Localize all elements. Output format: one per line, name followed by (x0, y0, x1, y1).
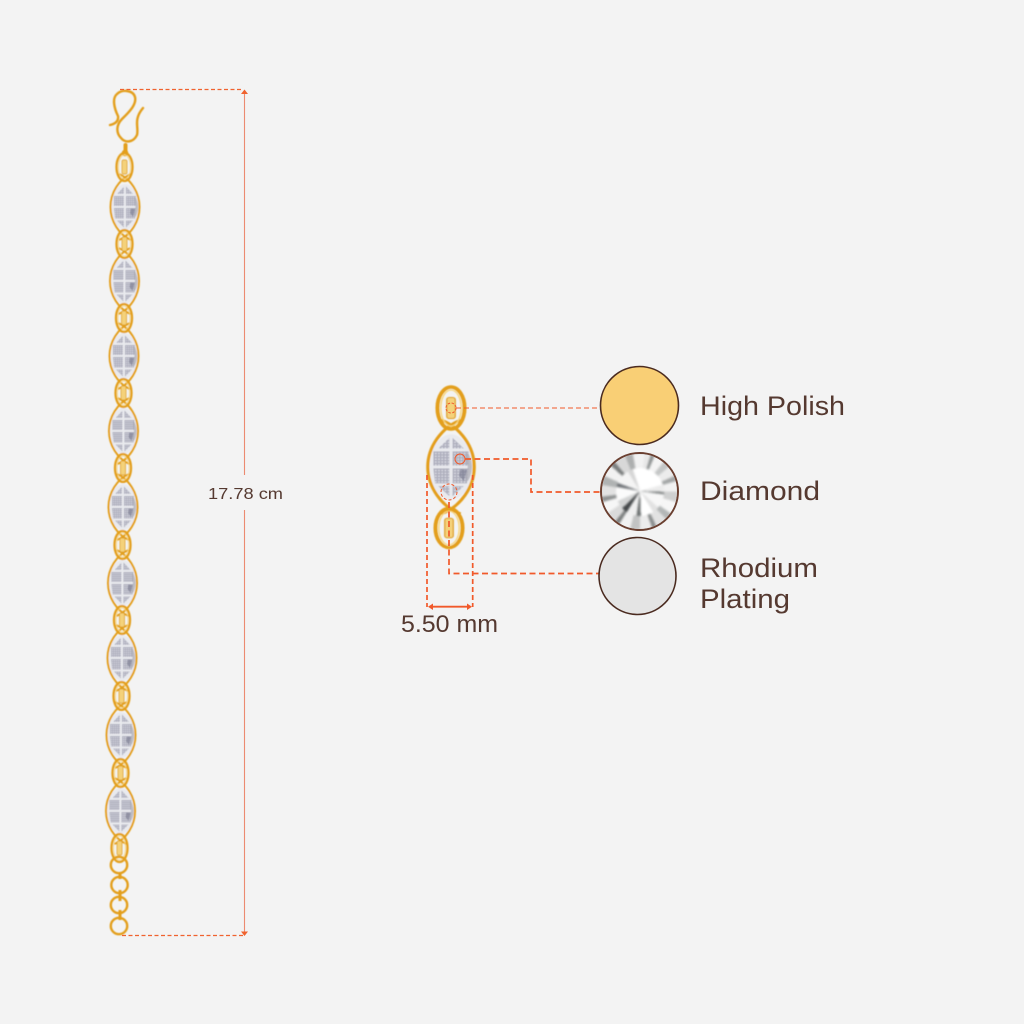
swatch: rhodium plating (599, 538, 676, 614)
label: high polish: High Polish (700, 391, 845, 421)
bracelet (106, 91, 143, 934)
label: rhodium plating: Rhodium (700, 553, 818, 583)
length label: 17.78 cm (208, 486, 283, 503)
length dimension line (120, 90, 248, 936)
end rings (111, 857, 128, 934)
label: rhodium plating (700, 553, 818, 614)
label: diamond: Diamond (700, 476, 820, 506)
swatch: high polish (600, 366, 678, 444)
icon: s-hook clasp (110, 91, 143, 155)
top small link (437, 387, 465, 429)
callout leader lines (441, 403, 600, 574)
swatch: diamond (600, 452, 679, 531)
width label: 5.50 mm (401, 611, 498, 638)
label: rhodium plating: Plating (700, 584, 790, 614)
enlarged central link (428, 420, 474, 514)
width dimension (427, 475, 473, 610)
enlarged link detail (428, 387, 474, 548)
bottom small link (435, 508, 463, 548)
chain links (106, 153, 140, 862)
